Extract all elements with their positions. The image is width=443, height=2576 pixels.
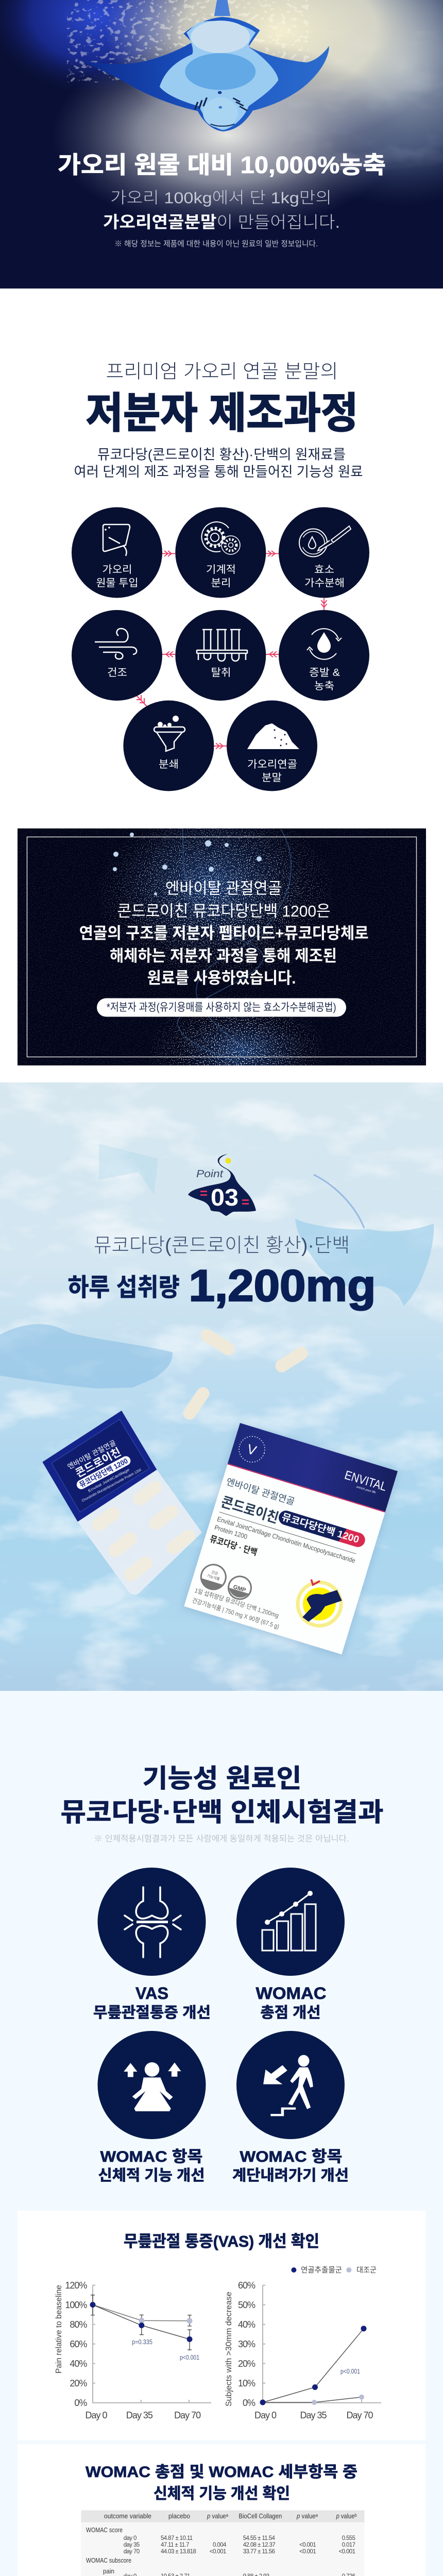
box product name [208,1477,371,1587]
data table: <0.001 [338,2549,355,2555]
data table: <0.001 [299,2542,316,2548]
line chart: pain relative to baseline: 0% [74,2398,87,2408]
line chart: subjects with decrease: Day 70 [346,2410,373,2420]
box product name: 뮤코다당단백 1200 [280,1511,361,1546]
data table: 47.11 ± 11.7 [161,2542,189,2548]
data table: 44.03 ± 13.818 [161,2549,196,2555]
step: grinding: 분쇄 [159,758,179,770]
callout text: 연골의 구조를 저분자 펩타이드+뮤코다당체로 [79,924,369,942]
panel: point 03 dosage [0,1082,443,1691]
box product name: 엔바이탈 관절연골 [225,1477,296,1507]
legend [291,2266,377,2275]
line chart: pain relative to baseline: p<0.001 [180,2353,199,2361]
table title: WOMAC 총점 및 WOMAC 세부항목 중 [86,2464,357,2481]
pill note [97,998,346,1017]
line chart: subjects with decrease: 60% [238,2280,255,2291]
benefit: WOMAC total: WOMAC [255,1984,327,2003]
blister pack: Envital JointCartilage [88,1468,130,1493]
data table: WOMAC subscore [86,2556,131,2564]
callout text: 원료를 사용하였습니다. [147,969,296,987]
chart title: 무릎관절 통증(VAS) 개선 확인 [124,2232,319,2250]
box certification seals: 건강 [211,1570,219,1576]
line chart: subjects with decrease: p<0.001 [340,2367,360,2375]
heading: low molecular process: 저분자 제조과정 [86,390,359,437]
data table: 33.77 ± 11.56 [243,2549,275,2555]
data table: day 70 [124,2549,140,2555]
line chart: pain relative to baseline: 60% [70,2339,87,2349]
box product name: 콘드로이친 [219,1494,280,1526]
subheading: 뮤코다당(콘드로이친 황산)·단백 [94,1235,350,1257]
callout text: 해체하는 저분자 과정을 통해 제조된 [110,947,337,965]
box product name: Protein 1200 [214,1523,248,1540]
step: deodorization: 탈취 [211,667,231,679]
product box [182,1422,399,1657]
box brand: ENVITAL [343,1468,388,1494]
pill note: *저분자 과정(유기용매를 사용하지 않는 효소가수분해공법) [107,1002,336,1013]
data table: <0.001 [210,2549,226,2555]
callout text: 엔바이탈 관절연골 [165,879,282,897]
line chart: subjects with decrease: 0% [243,2398,255,2408]
line chart: pain relative to baseline: p=0.335 [132,2338,152,2346]
line chart: subjects with decrease: 50% [238,2300,255,2310]
heading: low molecular process [74,361,363,480]
line chart: pain relative to baseline [55,2280,211,2420]
line chart: subjects with decrease: Subjects with >30mm decrease [225,2292,233,2406]
benefit: VAS knee pain [93,1868,211,2021]
step: enzyme hydrolysis: 효소 [314,564,334,575]
data table: BioCell Collagen [238,2512,282,2520]
data table: WOMAC score [86,2526,123,2534]
heading: clinical test results: ※ 인체적용시험결과가 모든 사람에게 동일하게 적용되는 것은 아닙니다. [94,1834,349,1843]
legend: 대조군 [356,2266,377,2275]
benefit: WOMAC stairs: 계단내려가기 개선 [232,2167,349,2184]
benefit: WOMAC stairs: WOMAC 항목 [240,2148,342,2165]
benefit: VAS knee pain: 무릎관절통증 개선 [93,2004,211,2021]
note: ※ 해당 정보는 제품에 대한 내용이 아닌 원료의 일반 정보입니다. [114,240,318,248]
panel: VAS charts [18,2211,425,2441]
step: mechanical separation: 기계적 [206,564,236,575]
step: deodorization [175,610,266,701]
line chart: subjects with decrease: 40% [238,2319,255,2330]
blister pack: 콘드로이친 [74,1446,123,1480]
heading: clinical test results: 기능성 원료인 [142,1764,302,1793]
line chart: pain relative to baseline: 80% [70,2319,87,2330]
blister pack: 엔바이탈 관절연골 [66,1439,117,1471]
step: raw ray input [72,507,162,598]
table title [86,2464,357,2502]
box logo [236,1433,268,1465]
icon: manta ray [83,0,329,131]
line chart: pain relative to baseline: Day 70 [174,2410,201,2420]
step: evaporation and concentration [279,610,369,701]
box dosage text: 건강기능식품 | 750 mg X 90정 (67.5 g) [191,1597,280,1630]
subtitle line 2: 가오리연골분말 이 만들어집니다. [103,213,340,231]
step: enzyme hydrolysis [279,507,369,598]
box logo: V [245,1441,259,1459]
benefit: WOMAC total: 총점 개선 [261,2004,320,2021]
panel: clinical results background [0,1691,443,2576]
heading: low molecular process: 뮤코다당(콘드로이친 황산)·단백의 원재료를 [97,447,346,463]
callout text [79,879,369,987]
benefit: WOMAC physical function: 신체적 기능 개선 [98,2167,205,2184]
step: enzyme hydrolysis: 가수분해 [304,577,345,589]
blister pack [42,1411,202,1595]
step: grinding [123,701,214,791]
callout text: 콘드로이친 뮤코다당단백 1200은 [117,902,331,920]
panel: WOMAC table [18,2444,425,2576]
data table: day 35 [124,2542,140,2548]
dosage headline: 하루 섭취량 [68,1274,179,1301]
data table: 42.08 ± 12.37 [243,2542,275,2548]
step: ray cartilage powder [227,701,317,791]
legend: 연골추출물군 [301,2266,342,2275]
blister pack: Chondroitin Mucopolysaccharide Protein 1200 [81,1468,142,1503]
dosage headline [68,1261,376,1311]
arrows between steps [137,551,327,749]
step: mechanical separation: 분리 [211,577,231,589]
heading: low molecular process: 프리미엄 가오리 연골 분말의 [106,361,338,382]
line chart: pain relative to baseline: 100% [65,2300,87,2310]
line chart: pain relative to baseline: Pain relative to beaseline [55,2285,63,2374]
benefit: WOMAC total [236,1868,345,2021]
heading: low molecular process: 여러 단계의 제조 과정을 통해 만들어진 기능성 원료 [74,464,363,480]
benefit: WOMAC physical function: WOMAC 항목 [100,2148,203,2165]
icon: point 03 badge: 03 [211,1184,238,1211]
benefit: WOMAC stairs [232,2031,349,2184]
box certification seals: 기능식품 [207,1573,220,1582]
data table [81,2510,364,2576]
dosage headline: 1,200mg [189,1261,376,1311]
data table: pain [103,2567,114,2575]
step: evaporation and concentration: 농축 [314,680,334,692]
heading: clinical test results [61,1764,383,1843]
table title: 신체적 기능 개선 확인 [154,2485,290,2502]
data table: outcome variable [104,2512,151,2520]
box product name: Envital JointCartilage Chondroitin Mucopolysaccharide [216,1515,356,1565]
panel: starfield callout [18,828,426,1065]
step: raw ray input: 원물 투입 [96,577,138,589]
step: evaporation and concentration: 증발 & [309,667,340,679]
box certification seals [197,1562,255,1602]
line chart: subjects with decrease: 10% [238,2378,255,2388]
line chart: subjects with decrease: Day 35 [300,2410,327,2420]
blister pack: 뮤코다당단백 1200 [78,1456,129,1489]
data table: 0.004 [213,2542,227,2548]
panel: hero manta ray [0,0,443,289]
process flow diagram [72,507,369,791]
heading: clinical test results: 뮤코다당·단백 인체시험결과 [61,1798,383,1827]
data table: 54.55 ± 11.54 [243,2535,276,2541]
step: raw ray input: 가오리 [102,564,132,575]
data table: p valueᵇ [336,2512,357,2520]
line chart: subjects with decrease [225,2280,381,2420]
box brand: enrich your life [356,1486,377,1495]
benefit: VAS knee pain: VAS [135,1984,168,2003]
data table: 54.87 ± 10.11 [161,2535,193,2541]
box product name: 뮤코다당 · 단백 [209,1534,259,1557]
step: ray cartilage powder: 분말 [262,772,282,784]
data table: placebo [168,2512,190,2520]
data table: p valueᵃ [207,2512,228,2520]
line chart: pain relative to baseline: 20% [70,2378,87,2388]
step: drying: 건조 [107,667,127,679]
data table: 0.555 [342,2535,355,2541]
floating tablets [190,1335,301,1413]
line chart: pain relative to baseline: 120% [65,2280,87,2291]
step: ray cartilage powder: 가오리연골 [247,758,297,770]
line chart: subjects with decrease: 20% [238,2359,255,2369]
line chart: pain relative to baseline: 40% [70,2359,87,2369]
box certification seals: GMP [232,1584,247,1594]
benefit: WOMAC physical function [98,2031,206,2184]
subtitle line 1: 가오리 100kg에서 단 1kg만의 [110,189,332,207]
step: drying [72,610,162,701]
line chart: subjects with decrease: 30% [238,2339,255,2349]
data table: <0.001 [299,2549,316,2555]
icon: point 03 badge [188,1154,256,1216]
title: 가오리 원물 대비 10,000%농축 [58,151,386,178]
line chart: subjects with decrease: Day 0 [254,2410,277,2420]
data table: 0.017 [342,2542,355,2548]
data table: p valueᵃ [296,2512,318,2520]
icon: knee [293,1577,347,1631]
data table: day 0 [124,2535,137,2541]
line chart: pain relative to baseline: Day 35 [126,2410,153,2420]
step: mechanical separation [175,507,266,598]
icon: point 03 badge: Point [196,1168,224,1180]
line chart: pain relative to baseline: Day 0 [85,2410,107,2420]
box dosage text: 1일 섭취량당 뮤코다당·단백 1,200mg [194,1587,280,1619]
